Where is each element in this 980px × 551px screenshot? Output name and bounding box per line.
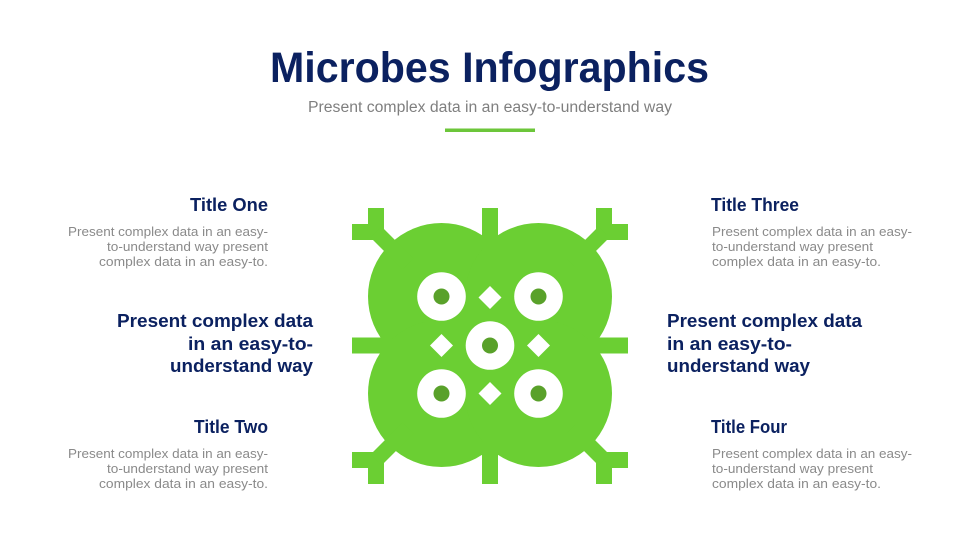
subtitle: Present complex data in an easy-to-understand way [308,99,672,116]
text block: title four body: Present complex data in an easy- [712,446,912,461]
text block: right callout: understand way [667,356,810,376]
text block: title one body: to-understand way present [107,239,268,254]
panel: title three [711,195,912,269]
text block: left callout [117,311,314,376]
panel: title one [68,195,268,269]
microbe diagonal arms [376,232,604,460]
text block: title four body [712,446,912,491]
white diamonds [430,286,550,405]
panel: title four [711,417,912,491]
text block: title two body: to-understand way present [107,461,268,476]
text block: left callout: in an easy-to- [188,334,313,354]
text block: title two body [68,446,268,491]
heading: title three: Title Three [711,195,799,215]
microbe spikes [352,208,628,484]
text block: title one body: Present complex data in an easy- [68,224,268,239]
text block: title one body: complex data in an easy-to. [99,254,268,269]
white cell rings [417,272,563,418]
text block: right callout: in an easy-to- [667,334,792,354]
text block: title one body [68,224,268,269]
text block: left callout: understand way [170,356,313,376]
text block: title four body: complex data in an easy-to. [712,476,881,491]
text block: left callout: Present complex data [117,311,314,331]
text block: right callout: Present complex data [667,311,863,331]
heading: title four: Title Four [711,417,787,437]
icon: microbe [352,208,628,484]
text block: title three body [712,224,912,269]
panel: title two [68,417,268,491]
title: Microbes Infographics [270,44,709,92]
text block: title two body: complex data in an easy-to. [99,476,268,491]
text block: title four body: to-understand way present [712,461,873,476]
text block: title three body: complex data in an easy-to. [712,254,881,269]
text block: title three body: Present complex data in an easy- [712,224,912,239]
text block: title three body: to-understand way present [712,239,873,254]
text block: title two body: Present complex data in an easy- [68,446,268,461]
heading: title one: Title One [190,195,268,215]
title underline accent [445,128,535,132]
text block: right callout [667,311,863,376]
microbe body [368,223,612,467]
heading: title two: Title Two [194,417,268,437]
dark nuclei [434,288,546,402]
